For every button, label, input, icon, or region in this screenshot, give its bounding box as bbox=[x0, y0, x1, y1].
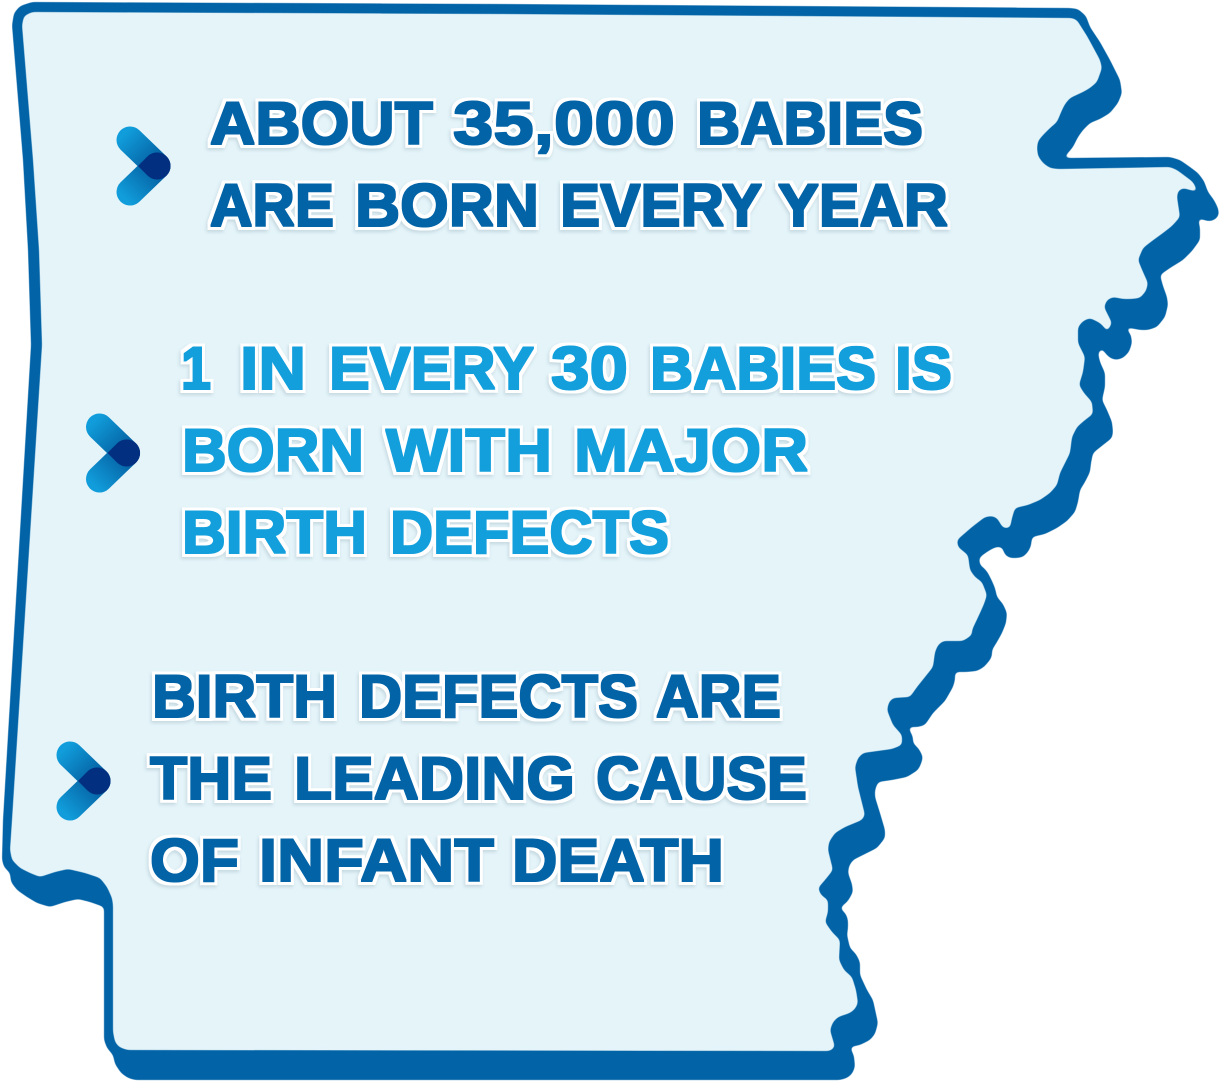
line 1: BIRTH bbox=[152, 663, 337, 730]
text block: 35,000 babies bbox=[210, 90, 948, 239]
line 1: BABIES bbox=[650, 335, 876, 402]
line 3: BIRTH bbox=[182, 499, 367, 566]
line 1: 35,000 bbox=[453, 90, 675, 157]
line 2: YEAR bbox=[778, 172, 948, 239]
line 2: EVERY bbox=[560, 172, 762, 239]
line 2: BORN bbox=[355, 172, 539, 239]
line 3: INFANT bbox=[259, 827, 494, 894]
line 2: ARE bbox=[210, 172, 334, 239]
line 2: THE bbox=[150, 745, 272, 812]
line 1: ABOUT bbox=[210, 90, 433, 157]
line 1: ARE bbox=[656, 663, 781, 730]
line 3: OF bbox=[150, 827, 239, 894]
line 1: IS bbox=[895, 335, 952, 402]
text block: leading cause of infant death bbox=[150, 663, 807, 894]
line 1: EVERY bbox=[329, 335, 534, 402]
icon: chevron 2 bbox=[100, 427, 140, 479]
line 1: IN bbox=[240, 335, 306, 402]
text block: 1 in every 30 babies bbox=[181, 335, 952, 566]
line 2: MAJOR bbox=[574, 417, 808, 484]
icon: chevron 1 bbox=[130, 140, 171, 192]
line 1: 1 bbox=[181, 335, 211, 402]
line 2: WITH bbox=[386, 417, 552, 484]
icon: chevron 3 bbox=[70, 755, 111, 807]
line 2: BORN bbox=[182, 417, 364, 484]
line 2: CAUSE bbox=[596, 745, 807, 812]
line 1: DEFECTS bbox=[359, 663, 638, 730]
line 3: DEFECTS bbox=[390, 499, 669, 566]
line 1: BABIES bbox=[697, 90, 923, 157]
line 2: LEADING bbox=[294, 745, 575, 812]
line 1: 30 bbox=[551, 335, 628, 402]
line 3: DEATH bbox=[512, 827, 724, 894]
